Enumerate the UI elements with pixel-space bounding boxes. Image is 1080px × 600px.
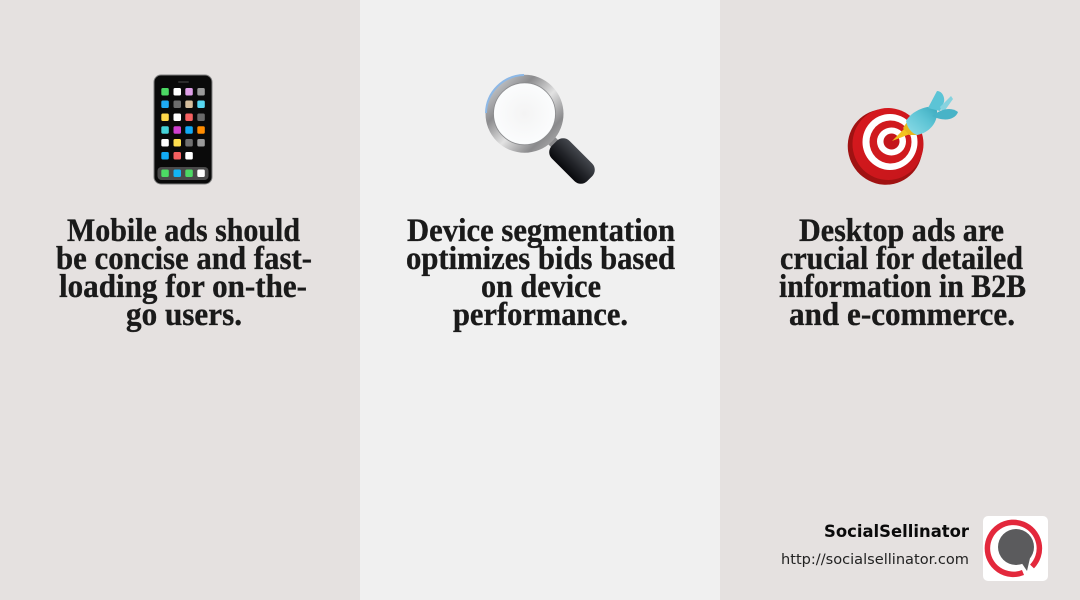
text: segmentation: on device (481, 269, 601, 305)
text: segmentation: performance. (453, 297, 628, 333)
website url: http://socialsellinator.com (781, 552, 969, 568)
text: desktop: information in B2B (779, 269, 1026, 305)
text: segmentation: Device segmentation (407, 213, 675, 249)
icon: magnifying glass (486, 75, 599, 188)
panel: segmentation (360, 0, 720, 600)
text: mobile: Mobile ads should (67, 213, 300, 249)
text: desktop: Desktop ads are (799, 213, 1004, 249)
brand name: SocialSellinator (824, 522, 970, 542)
text: desktop: crucial for detailed (780, 241, 1023, 277)
text: mobile: be concise and fast- (56, 241, 312, 277)
text: mobile: loading for on-the- (59, 269, 307, 305)
icon: mobile phone (154, 75, 212, 184)
text: segmentation (406, 213, 675, 333)
text: desktop: and e-commerce. (789, 297, 1015, 333)
text: segmentation: optimizes bids based (406, 241, 675, 277)
text: mobile: go users. (126, 297, 242, 333)
text: desktop (779, 213, 1026, 333)
icon: dart target (834, 91, 958, 198)
logo (983, 516, 1048, 581)
panel: desktop (720, 0, 1080, 600)
panel: mobile (0, 0, 360, 600)
text: mobile (56, 213, 312, 333)
